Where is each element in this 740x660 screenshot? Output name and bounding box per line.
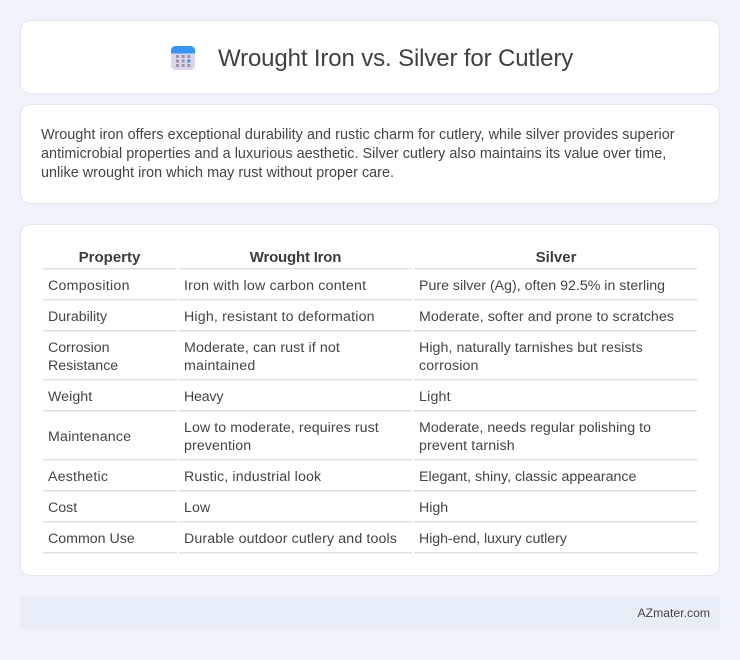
row: weight: Light	[419, 389, 451, 405]
row: corrosion resistance: Corrosion	[48, 340, 110, 356]
row: maintenance: Moderate, needs regular polishing to	[419, 420, 651, 436]
row: aesthetic	[48, 469, 636, 485]
row: cost: High	[419, 500, 448, 516]
row: weight: Heavy	[184, 389, 223, 405]
row: common use: Common Use	[48, 531, 135, 547]
row: weight: Weight	[48, 389, 92, 405]
row: cost: Low	[184, 500, 210, 516]
row: durability: Durability	[48, 309, 107, 325]
text: description: antimicrobial properties and a luxurious aesthetic. Silver cutlery also maintains its value over time,	[41, 146, 666, 162]
row: composition: Iron with low carbon content	[184, 278, 366, 294]
row: cost	[48, 500, 448, 516]
row: corrosion resistance: maintained	[184, 358, 255, 374]
panel: comparison table	[20, 224, 720, 576]
row: durability: High, resistant to deformation	[184, 309, 375, 325]
row: aesthetic: Aesthetic	[48, 469, 108, 485]
row: composition: Pure silver (Ag), often 92.5% in sterling	[419, 278, 665, 294]
row: cost: Cost	[48, 500, 77, 516]
row: corrosion resistance: Moderate, can rust if not	[184, 340, 340, 356]
table header: Property	[79, 249, 140, 266]
row: corrosion resistance	[48, 340, 643, 374]
row: corrosion resistance: High, naturally tarnishes but resists	[419, 340, 643, 356]
row: composition	[48, 278, 665, 294]
row: maintenance: Maintenance	[48, 429, 131, 445]
row: maintenance: Low to moderate, requires rust	[184, 420, 379, 436]
footer	[20, 596, 720, 630]
row: durability	[48, 309, 674, 325]
row: corrosion resistance: Resistance	[48, 358, 118, 374]
row: maintenance: prevention	[184, 438, 251, 454]
table header: Wrought Iron	[250, 249, 341, 266]
text: description: unlike wrought iron which may rust without proper care.	[41, 165, 394, 181]
table header	[79, 249, 576, 266]
icon: calendar	[171, 46, 195, 70]
row: durability: Moderate, softer and prone to scratches	[419, 309, 674, 325]
row: composition: Composition	[48, 278, 130, 294]
row: common use: High-end, luxury cutlery	[419, 531, 567, 547]
title: Wrought Iron vs. Silver for Cutlery	[218, 45, 573, 72]
row: common use	[48, 531, 567, 547]
row: maintenance	[48, 420, 651, 454]
row: corrosion resistance: corrosion	[419, 358, 479, 374]
text: description: Wrought iron offers exceptional durability and rustic charm for cutlery, while silver provides superior	[41, 127, 675, 143]
row: aesthetic: Elegant, shiny, classic appearance	[419, 469, 636, 485]
table header: Silver	[536, 249, 576, 266]
panel: header	[20, 20, 720, 94]
row: common use: Durable outdoor cutlery and tools	[184, 531, 397, 547]
row: maintenance: prevent tarnish	[419, 438, 515, 454]
text: description	[41, 127, 675, 181]
row: weight	[48, 389, 451, 405]
row: aesthetic: Rustic, industrial look	[184, 469, 321, 485]
panel: description	[20, 104, 720, 204]
footer credit: AZmater.com	[638, 606, 710, 620]
